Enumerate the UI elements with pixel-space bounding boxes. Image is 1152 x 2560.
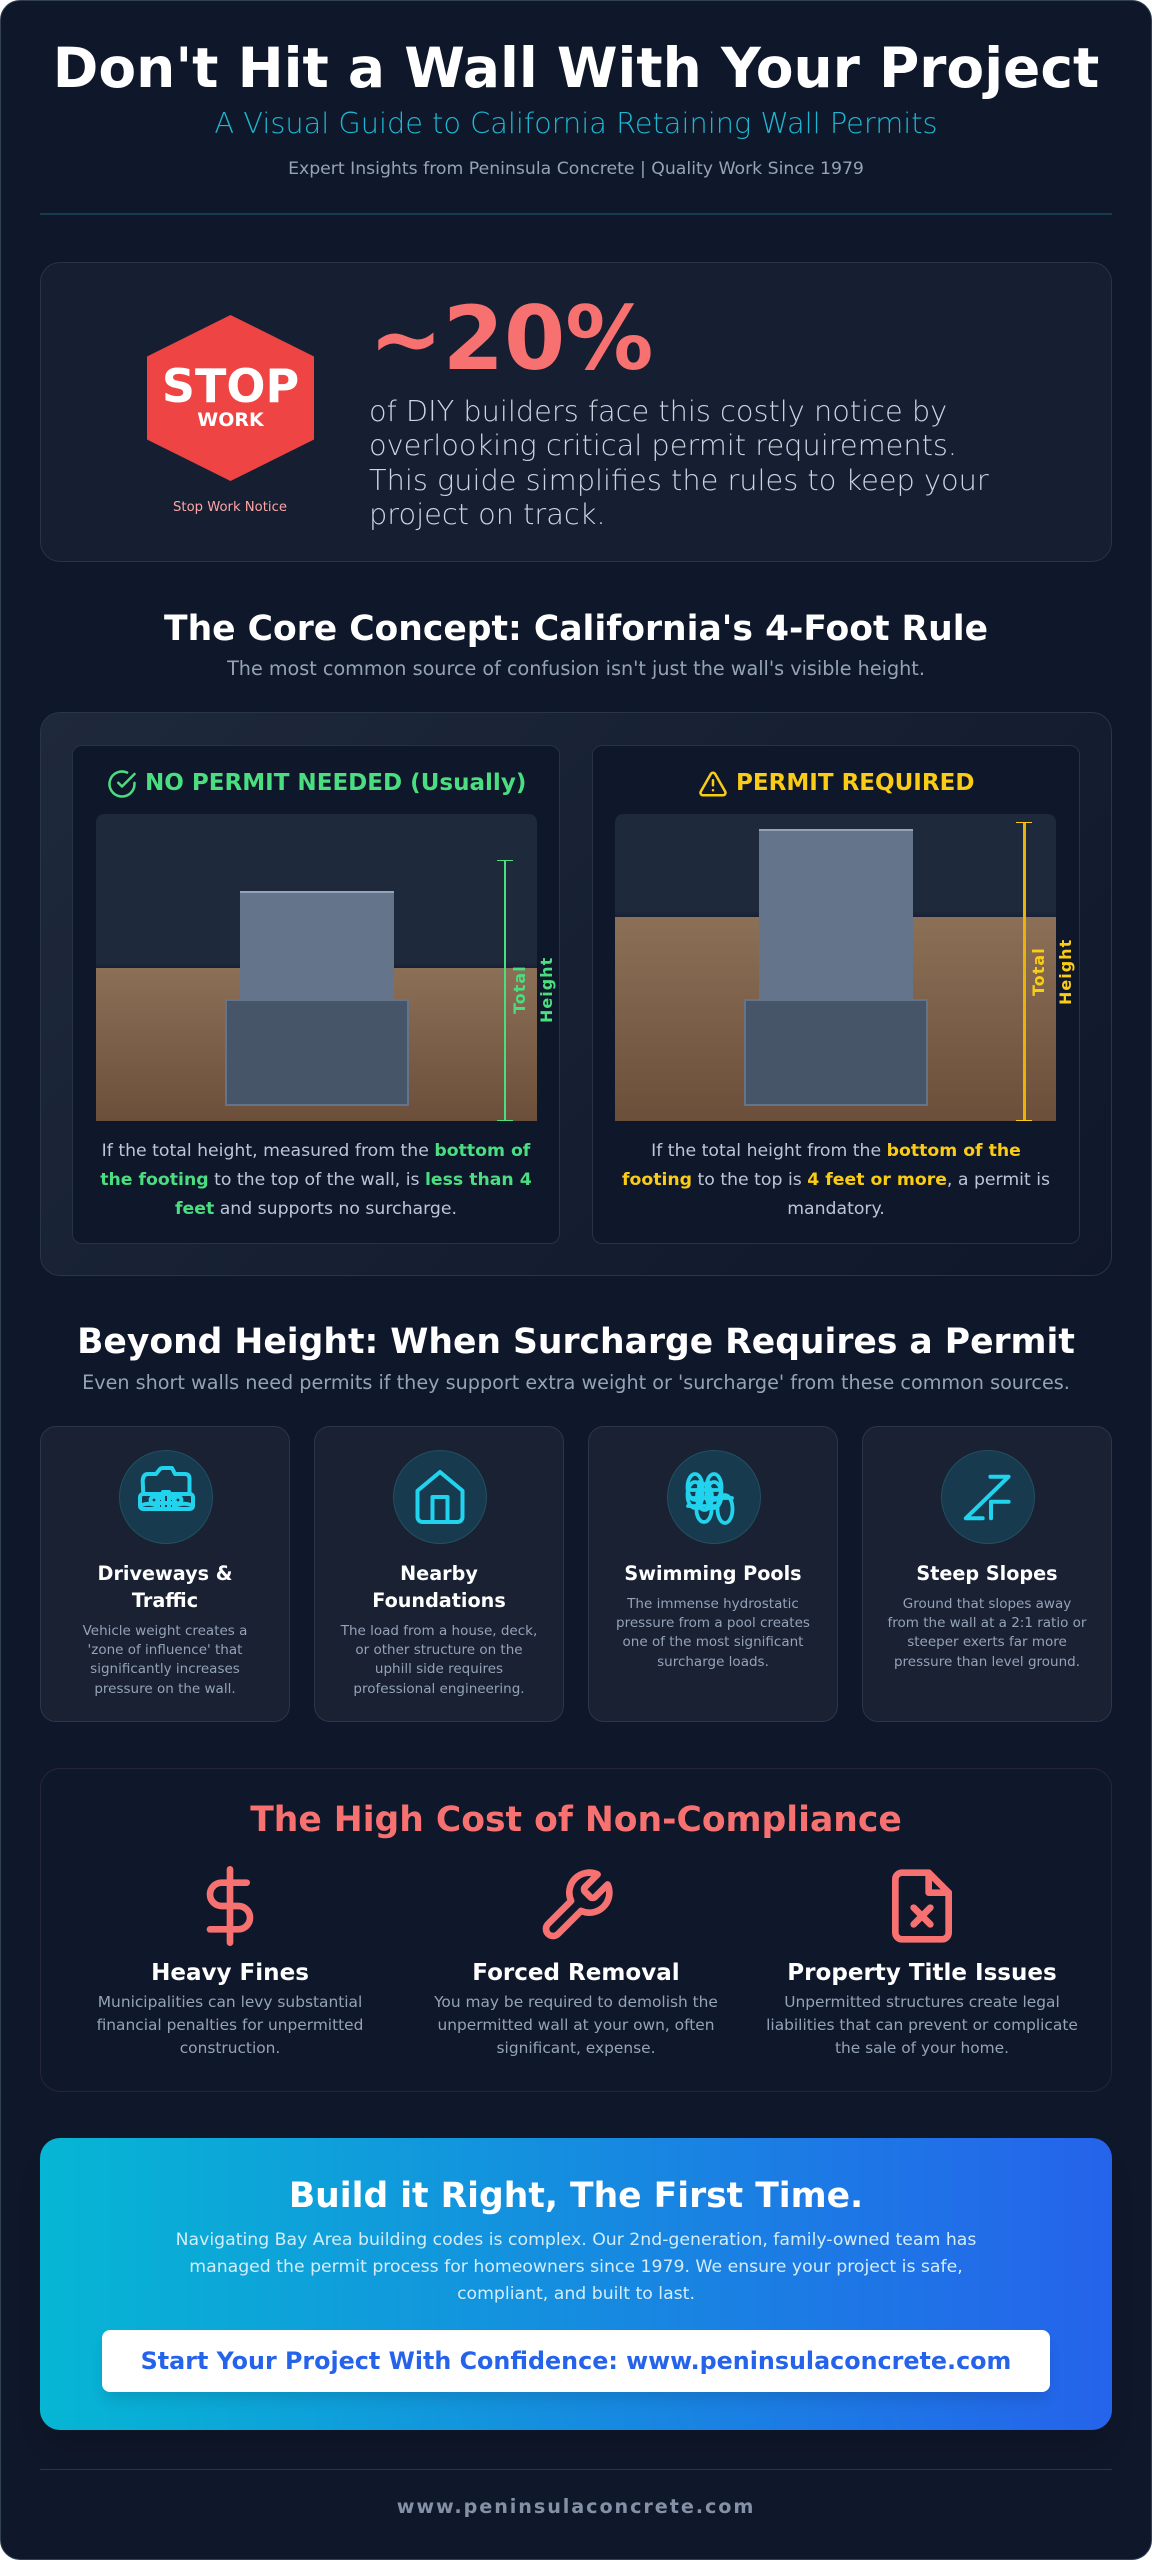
card: no permit needed [72, 745, 560, 1244]
explanation: permit required [622, 1141, 1050, 1219]
item: heavy fines [97, 1866, 363, 2057]
explanation: permit required: If the total height from the bottom of the [651, 1141, 1021, 1161]
item: forced removal [434, 1869, 718, 2057]
label: swimming pools: Swimming Pools [624, 1562, 802, 1585]
explanation: no permit: feet and supports no surcharge. [175, 1199, 457, 1219]
description: slopes: Ground that slopes away [903, 1596, 1071, 1612]
call to action text: managed the permit process for homeowners since 1979. We ensure your project is safe, [189, 2256, 963, 2276]
heading: permit required: PERMIT REQUIRED [736, 770, 974, 796]
label: property title issues: Property Title Issues [787, 1960, 1057, 1986]
label: forced removal: Forced Removal [472, 1960, 680, 1986]
heading: high cost: The High Cost of Non-Compliance [250, 1800, 902, 1840]
panel: high cost of non-compliance [40, 1768, 1112, 2092]
description: heavy fines: Municipalities can levy substantial [98, 1993, 362, 2011]
description: foundations [340, 1623, 537, 1697]
call to action text: compliant, and built to last. [457, 2284, 695, 2304]
diagram: short wall under four feet [96, 814, 537, 1121]
button: start your project [102, 2330, 1050, 2392]
description: pools: The immense hydrostatic [627, 1596, 799, 1612]
description: heavy fines: financial penalties for unpermitted [97, 2016, 363, 2034]
description: foundations: uphill side requires [375, 1661, 503, 1677]
description: slopes: pressure than level ground. [894, 1654, 1080, 1670]
description: pools: one of the most significant [623, 1634, 803, 1650]
heading: build it right: Build it Right, The First Time. [289, 2176, 863, 2216]
statistic description [369, 394, 989, 531]
card: steep slopes [862, 1426, 1112, 1722]
icon: wrench [542, 1869, 613, 1940]
label: driveways and traffic: Driveways & [98, 1562, 232, 1585]
label: total height: Height [537, 957, 556, 1023]
description: forced removal: unpermitted wall at your own, often [438, 2016, 714, 2034]
statistic description: of DIY builders face this costly notice by [369, 394, 947, 428]
description: title issues: the sale of your home. [835, 2039, 1009, 2057]
label: nearby foundations: Nearby [400, 1562, 478, 1585]
description: foundations: professional engineering. [353, 1681, 525, 1697]
label: total height: Total [510, 966, 529, 1014]
heading: beyond height: Beyond Height: When Surcharge Requires a Permit [77, 1322, 1075, 1362]
statistic description: overlooking critical permit requirements. [369, 428, 957, 462]
icon: stop work sign: STOP [162, 359, 299, 413]
sign caption: Stop Work Notice [173, 500, 287, 515]
item: property title issues [766, 1869, 1078, 2057]
call to action text: Navigating Bay Area building codes is complex. Our 2nd-generation, family-owned team has [176, 2230, 976, 2250]
height measure line [504, 860, 506, 1121]
icon: check circle [108, 770, 136, 798]
description: foundations: or other structure on the [355, 1642, 523, 1658]
statistic: about 20 percent: ~20% [369, 287, 653, 390]
explanation: no permit [100, 1141, 532, 1219]
description: title issues [766, 1993, 1078, 2057]
diagram: tall wall four feet or more [615, 814, 1056, 1121]
description: slopes: from the wall at a 2:1 ratio or [888, 1615, 1086, 1631]
label: driveways and traffic: Traffic [132, 1589, 198, 1612]
description: driveways: 'zone of influence' that [88, 1642, 242, 1658]
icon: car [119, 1450, 213, 1544]
icon: warning triangle [699, 772, 727, 796]
label: nearby foundations [372, 1562, 506, 1612]
card: driveways and traffic [40, 1426, 290, 1722]
description: driveways: Vehicle weight creates a [83, 1623, 247, 1639]
description: pools: pressure from a pool creates [616, 1615, 810, 1631]
description: pools: surcharge loads. [657, 1654, 769, 1670]
tagline: Expert Insights from Peninsula Concrete | Quality Work Since 1979 [288, 159, 864, 179]
label: heavy fines: Heavy Fines [151, 1960, 309, 1986]
description: pools [616, 1596, 810, 1670]
footer url: www.peninsulaconcrete.com [397, 2495, 755, 2518]
icon: stop work sign: WORK [197, 409, 264, 431]
description: title issues: Unpermitted structures create legal [784, 1993, 1060, 2011]
height measure line [1023, 822, 1026, 1121]
description: heavy fines [97, 1993, 363, 2057]
subheading: core concept: The most common source of confusion isn't just the wall's visible height. [227, 657, 925, 680]
description: title issues: liabilities that can prevent or complicate [766, 2016, 1078, 2034]
description: forced removal: significant, expense. [497, 2039, 655, 2057]
icon: stop work sign [147, 315, 314, 481]
heading: no permit needed: NO PERMIT NEEDED (Usually) [145, 770, 526, 796]
description: heavy fines: construction. [180, 2039, 280, 2057]
description: forced removal [434, 1993, 718, 2057]
description: driveways [82, 1623, 247, 1697]
label: steep slopes: Steep Slopes [916, 1562, 1058, 1585]
description: driveways: significantly increases [90, 1661, 240, 1677]
icon: water waves [667, 1450, 761, 1544]
label: nearby foundations: Foundations [372, 1589, 506, 1612]
label: total height [510, 957, 556, 1023]
description: slopes: steeper exerts far more [907, 1634, 1067, 1650]
button: start your project: Start Your Project With Confidence: www.peninsulaconcrete.com [141, 2347, 1011, 2375]
card: swimming pools [588, 1426, 838, 1722]
label: driveways and traffic [98, 1562, 232, 1612]
icon: house [393, 1450, 487, 1544]
panel: call to action [40, 2138, 1112, 2430]
statistic description: This guide simplifies the rules to keep your [369, 463, 989, 497]
panel: stop work statistic [40, 262, 1112, 562]
subtitle: A Visual Guide to California Retaining Wall Permits [214, 106, 938, 140]
explanation: permit required: mandatory. [787, 1199, 885, 1219]
call to action text [176, 2230, 976, 2304]
description: slopes [888, 1596, 1086, 1670]
subheading: beyond height: Even short walls need permits if they support extra weight or 'surcharge' from these common sources. [82, 1371, 1070, 1394]
explanation: permit required: footing to the top is 4 feet or more, a permit is [622, 1170, 1050, 1190]
icon: dollar sign [206, 1866, 254, 1946]
panel: four foot rule comparison [40, 712, 1112, 1276]
title: Don't Hit a Wall With Your Project [53, 36, 1099, 100]
heading: the core concept: The Core Concept: California's 4-Foot Rule [164, 609, 988, 649]
icon: file with x [892, 1869, 952, 1943]
label: total height [1029, 939, 1075, 1005]
description: driveways: pressure on the wall. [94, 1681, 236, 1697]
explanation: no permit: the footing to the top of the wall, is less than 4 [100, 1170, 532, 1190]
icon: slope [941, 1450, 1035, 1544]
explanation: no permit: If the total height, measured from the bottom of [102, 1141, 530, 1161]
label: total height: Height [1056, 939, 1075, 1005]
description: forced removal: You may be required to demolish the [434, 1993, 718, 2011]
description: foundations: The load from a house, deck, [341, 1623, 537, 1639]
statistic description: project on track. [369, 497, 606, 531]
card: permit required [592, 745, 1080, 1244]
label: total height: Total [1029, 948, 1048, 996]
card: nearby foundations [314, 1426, 564, 1722]
